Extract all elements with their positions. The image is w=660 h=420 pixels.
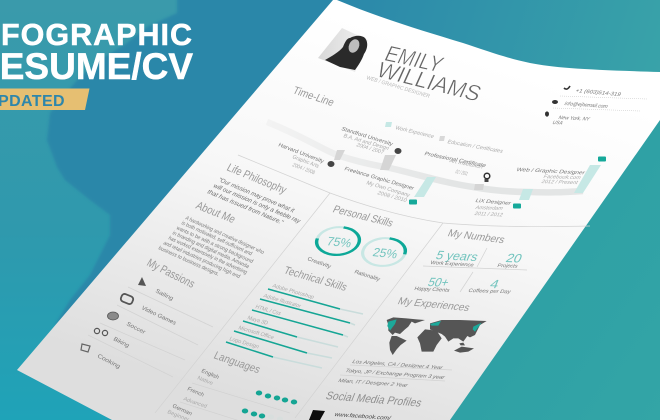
timeline entry: Web / Graphic Designer: Facebook.com <box>542 174 583 181</box>
timeline entry: Web / Graphic Designer: 2012 / Present <box>540 179 579 186</box>
timeline entry: LiX Designer: Amsterdam <box>474 205 504 212</box>
experience list: Milan, IT / Designer 2 Year <box>337 378 409 389</box>
contact details: New York, NY <box>557 115 591 122</box>
stat: 5 years <box>429 248 480 269</box>
job title: WEB / GRAPHIC DESIGNER <box>365 75 431 100</box>
skill labels <box>228 283 315 350</box>
panel: my passions <box>81 257 213 377</box>
timeline legend <box>385 122 504 155</box>
stat: 50+ happy clients: Happy Clients <box>413 286 451 294</box>
panel: social media profiles: Social Media Profiles <box>324 390 424 410</box>
about paragraph: business to business designs. <box>157 245 221 278</box>
timeline entry: Harvard University: Graphic Arts <box>291 154 320 170</box>
about paragraph <box>157 215 265 280</box>
donut chart: rationality 25%: Rationality <box>353 269 381 283</box>
stat: 20 projects: Projects <box>496 263 519 270</box>
experience list: Tokyo, JP / Exchange Program 3 year <box>344 368 446 381</box>
stat: 20 projects <box>496 251 524 270</box>
timeline <box>267 122 606 218</box>
donut chart: rationality 25%: 25% <box>371 245 399 261</box>
quote: "Our mission may prove what it <box>217 177 296 214</box>
passion: cooking: Cooking <box>96 354 121 370</box>
language: english: English <box>200 368 220 381</box>
contact details: USA <box>551 120 564 126</box>
timeline entry: Standford University <box>340 126 394 156</box>
timeline entry: LiX Designer: LiX Designer <box>474 198 512 207</box>
skill labels: Adobe Photoshop <box>271 283 315 301</box>
timeline icons <box>328 148 606 208</box>
about paragraph: A hardworking and creative designer who <box>184 215 265 256</box>
timeline entry: Professional Certificate: Art Institution <box>448 158 484 170</box>
quote: that has issued from Nature." <box>206 189 285 227</box>
donut chart: creativity 75%: 75% <box>325 234 353 250</box>
quote: will our mission is only a feeble ray <box>212 183 302 225</box>
stat: 4 coffees per day: Coffees per Day <box>467 288 512 295</box>
timeline entry: Web / Graphic Designer: Web / Graphic Designer <box>515 167 586 176</box>
timeline entry: LiX Designer <box>473 198 512 218</box>
stat: 4 coffees per day <box>467 277 512 295</box>
stat: 5 years: Work Experience <box>429 260 475 269</box>
passion: soccer: Soccer <box>125 321 146 336</box>
badge: updated <box>0 88 90 110</box>
language: french <box>180 386 283 420</box>
name: WILLIAMS <box>373 57 485 106</box>
panel: my experiences <box>337 295 487 389</box>
donut chart: creativity 75%: Creativity <box>306 256 332 270</box>
language: french: Advanced <box>182 396 208 410</box>
title <box>0 18 193 87</box>
panel: about me <box>157 200 265 280</box>
about paragraph: is both motivated, self-sufficient and <box>180 220 253 257</box>
panel: languages: Languages <box>212 350 263 376</box>
section dividers <box>155 155 590 418</box>
stat: 5 years: 5 years <box>434 248 480 264</box>
portrait photo <box>318 28 368 72</box>
timeline entry: Standford University: B.A. Art and Design <box>342 133 390 152</box>
donut chart: creativity 75% <box>306 225 364 270</box>
skill labels: Logo Design <box>228 336 260 350</box>
timeline entry: Harvard University <box>277 142 325 176</box>
world map <box>387 317 487 355</box>
language: french: French <box>186 386 205 399</box>
language: english: Native <box>196 375 214 387</box>
panel: my numbers: My Numbers <box>446 227 507 246</box>
timeline entry: Standford University: Standford University <box>340 126 394 148</box>
name: EMILY <box>381 41 448 77</box>
timeline legend: Education / Certificates <box>446 139 504 155</box>
timeline entry: Web / Graphic Designer <box>515 167 586 186</box>
timeline entry: Freelance Graphic Designer: My Own Company <box>365 180 411 199</box>
timeline entry: Professional Certificate: 02 / 2011 <box>454 169 469 177</box>
panel: personal skills: Personal Skills <box>331 204 395 230</box>
language: german <box>166 403 193 420</box>
timeline legend: Work Experience <box>394 125 435 140</box>
contact details <box>545 86 647 126</box>
skill labels: Maya 3D <box>246 315 269 327</box>
skill labels: Adobe Illustrator <box>262 293 302 310</box>
contact details: +1 (603)514-319 <box>574 88 622 98</box>
panel: social media profiles <box>309 390 424 420</box>
timeline entry: Freelance Graphic Designer: 2008 / 2010 <box>376 190 408 204</box>
contact details: info@ejhemail.com <box>563 101 609 110</box>
panel: technical skills: Technical Skills <box>282 265 350 294</box>
donut chart: rationality 25% <box>353 236 410 283</box>
language: german: German <box>171 403 193 417</box>
skill bars <box>226 289 363 368</box>
about paragraph: has worked extensively in the advertising <box>167 235 248 276</box>
skill labels: HTML / Css <box>254 304 282 317</box>
panel: my passions: My Passions <box>144 257 197 291</box>
passion: biking: Biking <box>112 336 130 349</box>
about paragraph: in branding and digital media. Amanda <box>171 230 251 270</box>
panel: about me: About Me <box>194 200 237 226</box>
about paragraph: and retail industries producing high end <box>162 240 241 280</box>
panel: life philosophy: Life Philosophy <box>225 162 289 197</box>
timeline entry: Professional Certificate: Professional Certificate <box>423 151 487 169</box>
passion: video games: Video Games <box>140 305 177 327</box>
passion: sailing: Sailing <box>154 288 174 302</box>
panel: personal skills <box>306 204 410 283</box>
heading: time-line: Time-Line <box>291 85 336 109</box>
panel: technical skills <box>226 265 363 368</box>
icon: facebook <box>309 410 325 420</box>
stat: 50+ happy clients: 50+ <box>426 275 451 289</box>
experience list <box>337 359 452 389</box>
language: english <box>192 368 297 413</box>
panel: languages <box>166 350 297 420</box>
timeline entry: Standford University: 2004 / 2007 <box>355 142 385 156</box>
timeline entry: LiX Designer: 2011 / 2012 <box>473 211 504 218</box>
panel: my numbers <box>413 227 527 295</box>
timeline entry: Harvard University: Harvard University <box>277 142 325 165</box>
timeline entry: Harvard University: 2004 / 2008 <box>291 162 316 176</box>
about paragraph: wants to be with a strong background <box>174 225 254 265</box>
timeline entry: Freelance Graphic Designer <box>343 166 415 204</box>
timeline entry: Freelance Graphic Designer: Freelance Graphic Designer <box>343 166 415 192</box>
skill labels: Microsoft Office <box>237 325 275 341</box>
stat: 50+ happy clients <box>413 275 451 294</box>
stat: 20 projects: 20 <box>504 251 524 265</box>
stat: 4 coffees per day: 4 <box>488 277 501 291</box>
experience list: Los Angeles, CA / Designer 4 Year <box>351 359 444 371</box>
panel: life philosophy <box>206 162 302 227</box>
panel: my experiences: My Experiences <box>396 295 472 314</box>
timeline entry: Professional Certificate <box>423 151 487 177</box>
